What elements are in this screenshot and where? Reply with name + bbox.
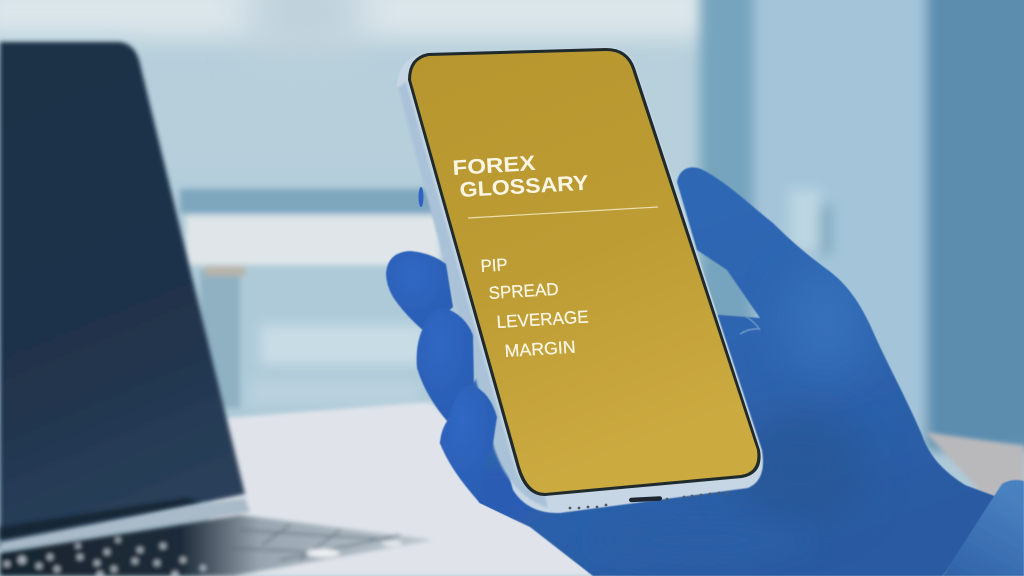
phone [397, 47, 763, 513]
glossary terms: SPREAD [488, 279, 559, 303]
title: Forex Glossary [452, 152, 589, 202]
title: Forex Glossary: FOREX [452, 152, 536, 180]
thumb and palm [440, 167, 1000, 576]
charging port [629, 496, 662, 502]
glossary terms [480, 254, 589, 361]
phone body [397, 47, 763, 513]
divider line [468, 207, 658, 218]
table surface [200, 402, 1024, 576]
screen bezel [408, 48, 761, 496]
speaker grilles [569, 492, 728, 509]
laptop hinge strip [0, 498, 250, 552]
fingers around phone edge [386, 251, 497, 503]
laptop hinge shadow [0, 498, 200, 540]
glossary terms: LEVERAGE [496, 306, 589, 332]
glove cuff [943, 480, 1024, 576]
laptop screen [0, 42, 245, 548]
phone side highlight [398, 82, 548, 508]
yellow screen [411, 51, 757, 493]
glossary terms: PIP [480, 254, 508, 276]
keyboard [0, 515, 433, 576]
index finger [386, 251, 453, 332]
phone side button [418, 187, 424, 207]
ring finger [440, 385, 497, 503]
middle finger [417, 308, 474, 421]
glossary terms: MARGIN [504, 337, 576, 361]
hand: thumb, palm and wrist [440, 167, 1024, 576]
laptop [0, 42, 433, 576]
palm shading [478, 258, 878, 524]
title: Forex Glossary: GLOSSARY [459, 172, 589, 202]
